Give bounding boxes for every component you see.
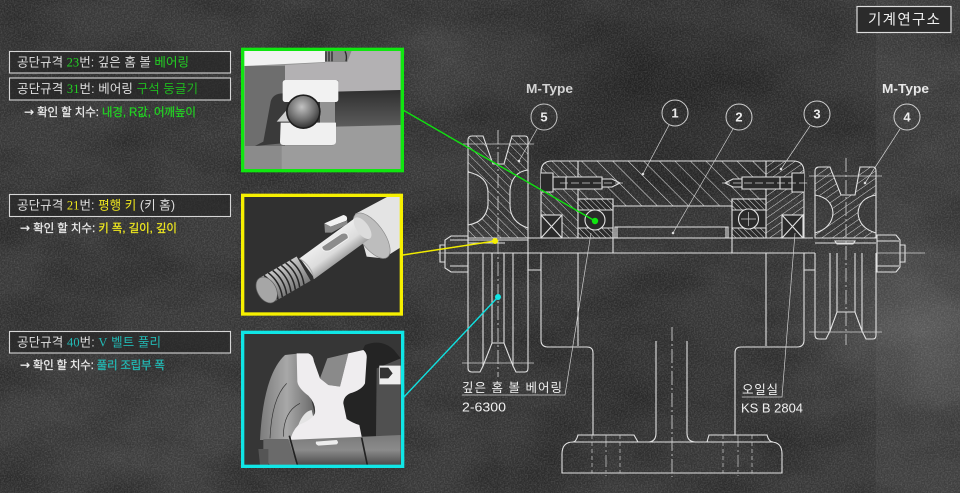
M-Type label left: M-Type (526, 82, 573, 96)
dimensions to check: pulley: → 확인 할 치수: 풀리 조립부 폭 (20, 358, 165, 372)
part callout 5 (518, 104, 557, 162)
oil seal annotation: KS B 2804 (741, 402, 803, 416)
part callout 4 (864, 104, 920, 184)
pointer line: green to bearing (403, 110, 598, 224)
photo panel: V belt pulley cross section, cyan frame (243, 332, 403, 466)
bearing annotation (462, 233, 591, 414)
part callout 3 (780, 101, 830, 170)
spec box: standard 31 bearing fillet (10, 78, 230, 100)
spec group: V belt pulley (10, 332, 230, 372)
M-Type label right: M-Type (882, 82, 929, 96)
left bearing (578, 199, 613, 238)
label: institute name (857, 6, 951, 32)
spec box: standard 21 parallel key: 공단규격 21번: 평행 키 (키 홈) (17, 198, 175, 212)
housing bolts (541, 173, 810, 192)
shaft (468, 238, 815, 346)
bore spacer (615, 227, 728, 238)
right bearing (732, 199, 766, 238)
spec group: bearing standards (10, 52, 230, 119)
oil seals (541, 215, 803, 238)
spec box: standard 23 deep groove ball bearing: 공단규격 23번: 깊은 홈 볼 베어링 (17, 56, 189, 70)
pointer line: yellow to key (403, 238, 498, 255)
photo panel: ball bearing cutaway, green frame (243, 49, 403, 171)
part callout 1: 1 (671, 106, 679, 120)
shaft end nuts and centerline (438, 235, 925, 272)
part callout 4: 4 (903, 110, 911, 124)
spec group: parallel key (10, 194, 230, 235)
spec box: standard 31 bearing fillet: 공단규격 31번: 베어링 구석 둥글기 (17, 82, 198, 96)
spec box: standard 21 parallel key (10, 194, 230, 216)
dimensions to check: bearing: → 확인 할 치수: 내경, R값, 어깨높이 (24, 105, 196, 119)
pointer line: cyan to pulley (403, 294, 501, 398)
part callout 5: 5 (540, 110, 548, 124)
dimensions to check: key: → 확인 할 치수: 키 폭, 길이, 깊이 (20, 221, 177, 235)
left V pulley (462, 130, 534, 377)
spec box: standard 40 V belt pulley: 공단규격 40번: V 벨트 풀리 (17, 336, 161, 350)
spec box: standard 23 deep groove ball bearing (10, 52, 230, 73)
part callout 2: 2 (735, 110, 743, 124)
oil seal annotation (741, 233, 803, 416)
oil seal annotation: 오일실 (742, 383, 778, 397)
label: institute name: 기계연구소 (868, 12, 940, 28)
bearing annotation: 2-6300 (462, 400, 506, 414)
part callout 3: 3 (813, 106, 821, 122)
right V pulley (809, 158, 882, 345)
support stand and base (541, 270, 804, 477)
part callout 2 (672, 104, 752, 234)
bearing annotation: 깊은 홈 볼 베어링 (462, 381, 562, 395)
technical drawing: shaft assembly (438, 82, 929, 477)
spec box: standard 40 V belt pulley (10, 332, 230, 353)
part callout 1 (642, 100, 688, 175)
housing with hatching (468, 161, 815, 346)
photo panel: shaft with parallel key, yellow frame (243, 195, 401, 314)
